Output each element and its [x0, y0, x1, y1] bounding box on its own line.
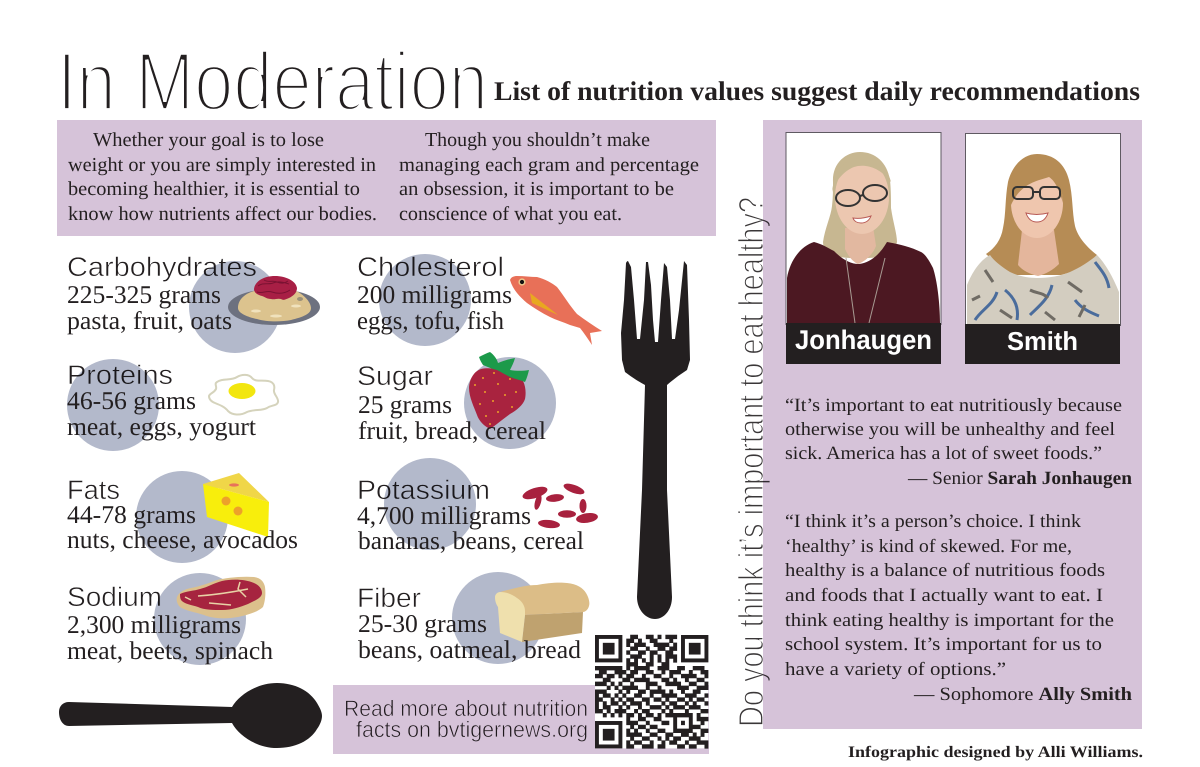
text block: fats values: nuts, cheese, avocados [67, 525, 298, 554]
quote: Ally Smith: and foods that I actually want to eat. I [785, 585, 1103, 606]
quote: Ally Smith: “I think it’s a person’s choice. I think [785, 511, 1082, 532]
quote: Ally Smith: think eating healthy is important for the [785, 610, 1114, 631]
text block: intro left column: Whether your goal is to lose [93, 129, 324, 151]
nutrient: carbohydrates: Carbohydrates [67, 252, 257, 282]
icon: cheese wedge [203, 473, 269, 537]
nutrient: sugar: Sugar [357, 361, 433, 391]
text block: fats values: 44-78 grams [67, 500, 196, 529]
text block: proteins values [67, 386, 256, 441]
text block: potassium values: bananas, beans, cereal [358, 526, 584, 555]
nutrient: fiber [357, 572, 589, 664]
quote: Ally Smith: — Sophomore Ally Smith [913, 684, 1133, 705]
callout: read more: Read more about nutrition [344, 696, 588, 721]
quote: Ally Smith: healthy is a balance of nutritious foods [785, 560, 1105, 581]
callout: read more [333, 685, 709, 754]
icon: beans [521, 481, 599, 529]
nutrient: proteins: Proteins [67, 360, 173, 390]
text block: carbohydrates values [67, 280, 232, 335]
quote: Sarah Jonhaugen: “It’s important to eat nutritiously because [785, 395, 1122, 416]
icon: fork [621, 261, 690, 619]
text block: intro left column: becoming healthier, it is essential to [68, 178, 360, 200]
icon: steak [177, 577, 265, 618]
quote: Sarah Jonhaugen: otherwise you will be unhealthy and feel [785, 419, 1115, 440]
text block: cholesterol values [357, 280, 512, 335]
text block: proteins values: meat, eggs, yogurt [67, 412, 256, 441]
nutrient: sodium [67, 573, 273, 665]
photo: Smith [965, 134, 1120, 364]
QR code [595, 635, 708, 748]
icon: spoon [59, 683, 322, 748]
text block: intro right column: Though you shouldn’t make [425, 129, 650, 151]
text block: intro left column: know how nutrients affect our bodies. [68, 203, 377, 225]
panel: quotes [763, 120, 1142, 729]
text block: sodium values [67, 610, 273, 665]
text block: sugar values: 25 grams [358, 390, 452, 419]
quote: Ally Smith: have a variety of options.” [785, 659, 1006, 680]
photo: Smith: Smith [1007, 326, 1078, 356]
quote: Ally Smith [785, 511, 1133, 705]
icon: bread loaf [495, 583, 589, 642]
text block: intro right column: managing each gram and percentage [399, 154, 699, 176]
vertical heading: Do you think it’s important to eat healthy? [732, 197, 771, 727]
text block: carbohydrates values: pasta, fruit, oats [67, 306, 232, 335]
nutrient: cholesterol: Cholesterol [357, 252, 504, 282]
nutrient: sugar [357, 352, 556, 449]
text block: fiber values: beans, oatmeal, bread [358, 635, 581, 664]
text block: sugar values [358, 390, 546, 445]
icon: strawberry [469, 352, 529, 429]
text block: sodium values: meat, beets, spinach [67, 636, 273, 665]
quote: Ally Smith: school system. It’s important for us to [785, 634, 1102, 655]
text block: sodium values: 2,300 milligrams [67, 610, 241, 639]
text block: intro right column: conscience of what you eat. [399, 203, 622, 225]
nutrient: fiber: Fiber [357, 583, 421, 613]
text block: proteins values: 46-56 grams [67, 386, 196, 415]
panel: introduction [57, 120, 716, 236]
quote: Ally Smith: ‘healthy’ is kind of skewed. For me, [785, 536, 1072, 557]
text block: fiber values: 25-30 grams [358, 609, 487, 638]
nutrient: fats: Fats [67, 475, 120, 505]
text block: cholesterol values: eggs, tofu, fish [357, 306, 504, 335]
text block: sugar values: fruit, bread, cereal [358, 416, 546, 445]
quote: Sarah Jonhaugen: — Senior Sarah Jonhaugen [907, 468, 1133, 489]
nutrient: proteins [67, 359, 278, 451]
nutrient: fats [67, 471, 298, 563]
text block: carbohydrates values: 225-325 grams [67, 280, 221, 309]
subtitle: List of nutrition values suggest daily recommendations [494, 76, 1140, 106]
text block: potassium values [357, 501, 584, 555]
title: In Moderation [57, 35, 488, 128]
text block: intro left column: weight or you are simply interested in [68, 154, 376, 176]
text block: cholesterol values: 200 milligrams [357, 280, 512, 309]
text block: intro left column [68, 129, 377, 225]
nutrient: carbohydrates [67, 252, 320, 353]
nutrient: cholesterol [357, 252, 602, 346]
text block: intro right column: an obsession, it is important to be [399, 178, 674, 200]
text block: fiber values [358, 609, 581, 664]
photo: Jonhaugen [786, 132, 941, 364]
credit line: Infographic designed by Alli Williams. [848, 744, 1143, 761]
text block: potassium values: 4,700 milligrams [357, 501, 531, 530]
quote: Sarah Jonhaugen [785, 395, 1133, 489]
nutrient: sodium: Sodium [67, 582, 162, 612]
nutrient: potassium [357, 458, 599, 555]
callout: read more: facts on bvtigernews.org [356, 717, 588, 742]
icon: spaghetti plate [228, 276, 320, 325]
icon: fish [510, 276, 602, 345]
text block: intro right column [399, 129, 699, 225]
quote: Sarah Jonhaugen: sick. America has a lot of sweet foods.” [785, 443, 1102, 464]
icon: fried egg [209, 375, 278, 415]
nutrient: potassium: Potassium [357, 475, 490, 505]
text block: fats values [67, 500, 298, 554]
photo: Jonhaugen: Jonhaugen [795, 325, 932, 355]
